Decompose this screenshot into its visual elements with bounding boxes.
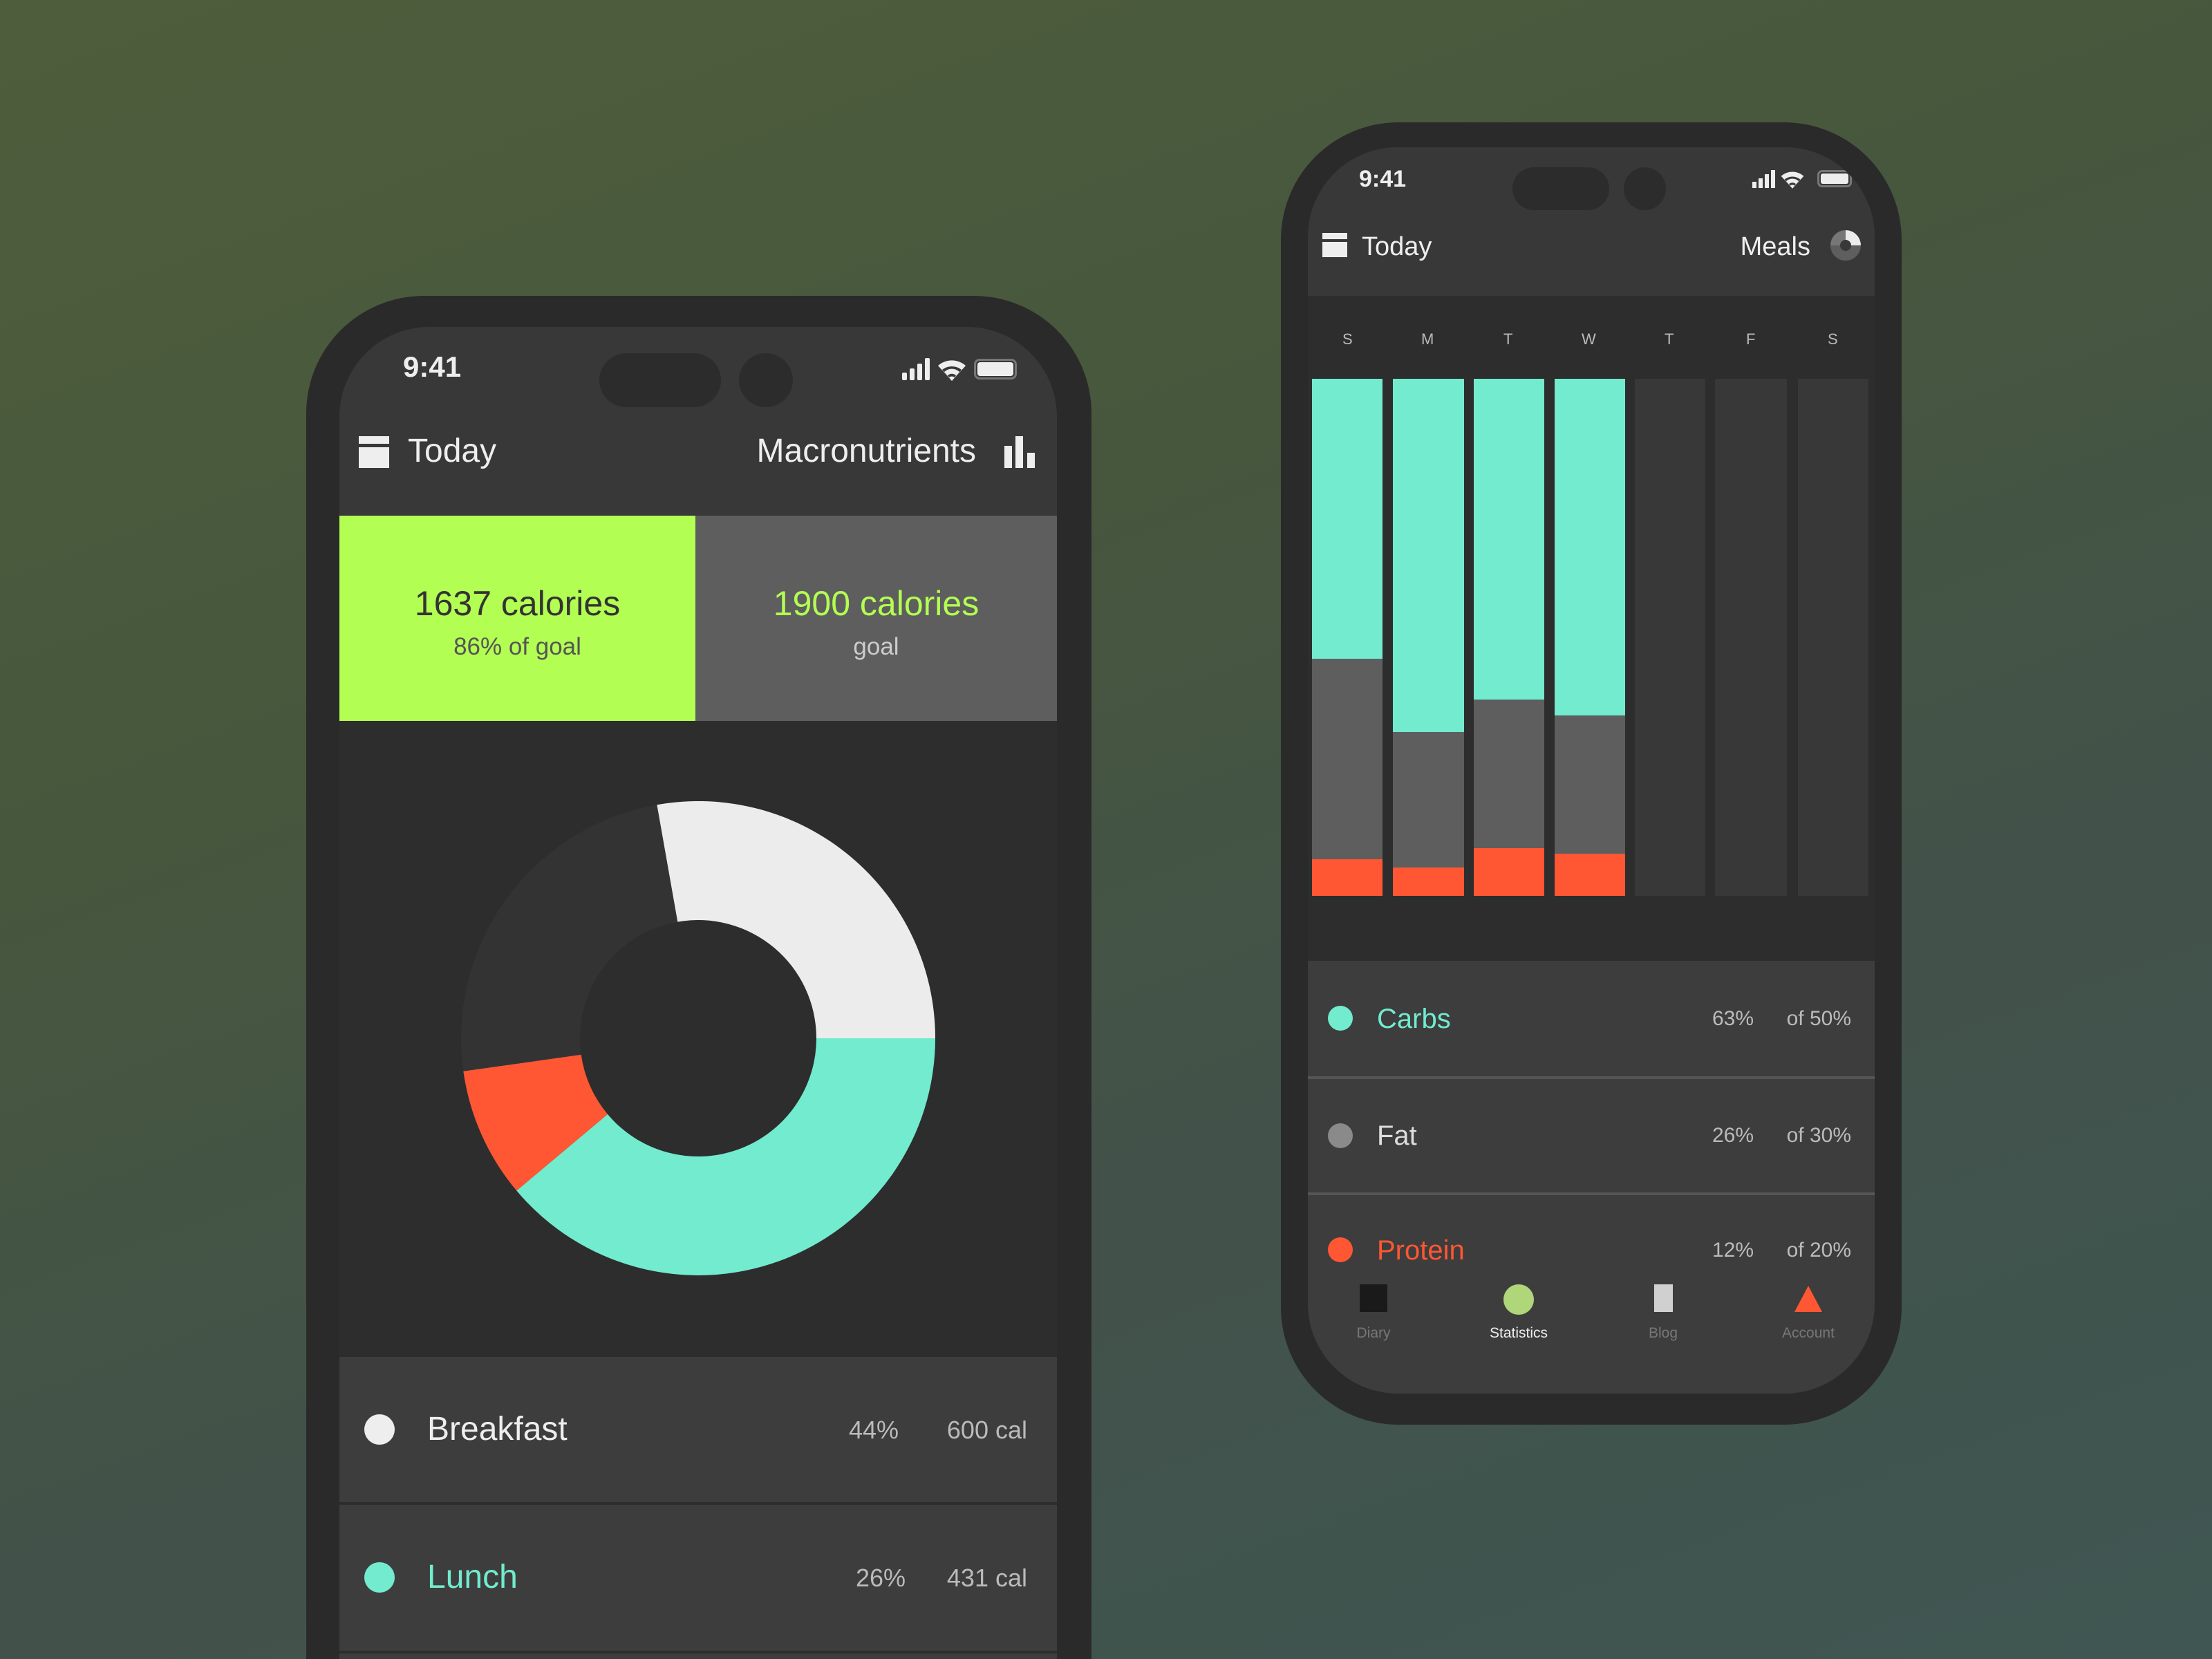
status bar and header [339,327,1057,516]
today label: Today [1362,232,1432,261]
fat row [1308,1079,1875,1192]
camera [1624,167,1666,210]
breakfast row: 600 cal [947,1416,1027,1444]
protein row: of 20% [1787,1239,1851,1262]
protein row [1328,1235,1851,1266]
right phone screen [1308,147,1875,1394]
tab: statistics [1490,1284,1548,1341]
calorie goal card [695,516,1057,721]
macronutrients label: Macronutrients [757,433,976,469]
dynamic island [1512,167,1609,210]
calorie goal card: 1900 calories [774,584,979,623]
empty bars [1635,379,1868,896]
weekly bar chart: S [1828,330,1838,348]
breakfast row [339,1357,1057,1502]
calories consumed card: 86% of goal [453,633,581,660]
camera [739,353,793,407]
bar W [1555,379,1625,896]
tab: diary [1356,1284,1391,1341]
donut chart [463,801,935,1275]
breakfast row: 44% [849,1416,899,1444]
fat row: 26% [1712,1124,1754,1147]
calories consumed card [339,516,695,721]
fat row: Fat [1377,1121,1417,1151]
carbs row: 63% [1712,1007,1754,1030]
meals donut icon [1830,230,1861,261]
weekly bar chart [1308,296,1875,961]
lunch row: Lunch [427,1559,518,1595]
time: 9:41 [403,350,461,383]
breakfast row: Breakfast [427,1411,568,1447]
weekly bar chart: S [1342,330,1353,348]
weekly bar chart: T [1665,330,1674,348]
lunch row: 26% [856,1564,906,1592]
carbs row: of 50% [1787,1007,1851,1030]
status icons [1752,170,1852,189]
tab: blog [1649,1284,1678,1341]
bar S [1312,379,1382,896]
right phone [1281,122,1902,1425]
weekly bar chart: W [1582,330,1596,348]
bar icon [1004,436,1035,468]
calendar icon [1322,233,1347,257]
tab: account [1782,1286,1835,1341]
bar T [1474,379,1544,896]
carbs row [1308,961,1875,1076]
weekly bar chart: F [1746,330,1755,348]
lunch row: 431 cal [947,1564,1027,1592]
tab: blog: Blog [1649,1325,1678,1341]
bar M [1393,379,1464,896]
today label: Today [408,433,496,469]
calendar icon [359,436,389,468]
weekly bar chart: M [1421,330,1434,348]
fat row: of 30% [1787,1124,1851,1147]
tab: statistics: Statistics [1490,1325,1548,1341]
left phone screen [339,327,1057,1659]
calories consumed card: 1637 calories [415,584,620,623]
protein row: Protein [1377,1235,1465,1266]
status icons [902,358,1017,381]
weekly bar chart: T [1503,330,1512,348]
carbs row: Carbs [1377,1004,1451,1034]
tab: account: Account [1782,1325,1835,1341]
meals label: Meals [1741,232,1810,261]
lunch row [339,1505,1057,1651]
dynamic island [599,353,721,407]
status bar and header [1308,147,1875,296]
tab bar [1356,1284,1835,1341]
left phone [306,296,1091,1659]
tab: diary: Diary [1356,1325,1391,1341]
calorie goal card: goal [853,633,899,660]
protein row: 12% [1712,1239,1754,1262]
time: 9:41 [1359,166,1406,192]
